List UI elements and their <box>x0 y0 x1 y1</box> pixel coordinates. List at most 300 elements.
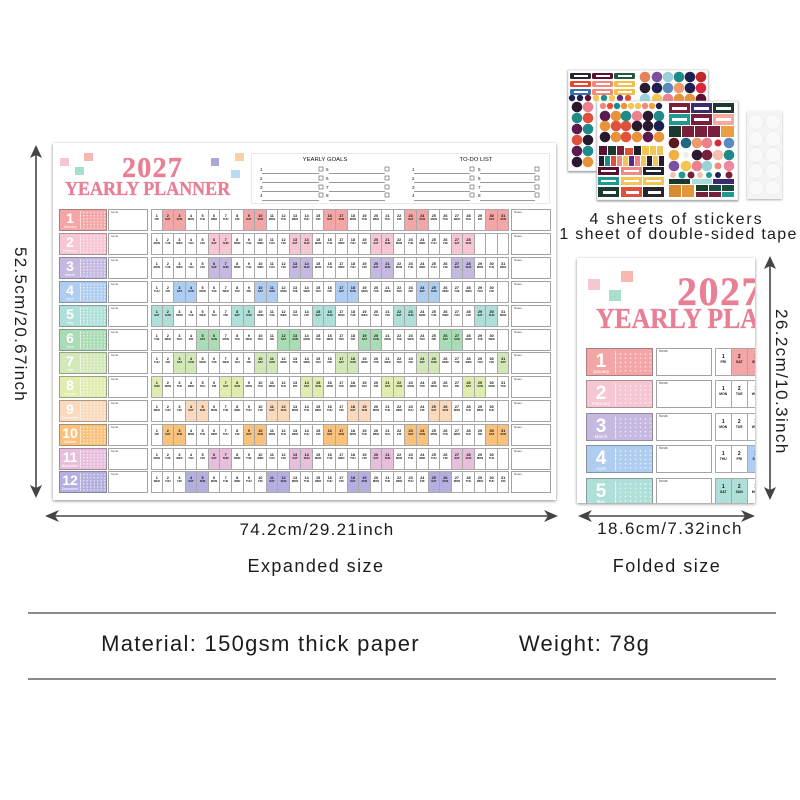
row: December: 29 <box>478 476 482 480</box>
row: March: 7 <box>225 262 227 266</box>
row: April: THU <box>396 290 402 293</box>
row: September: MON <box>373 409 379 412</box>
row: December: WED <box>154 480 160 483</box>
row: June: 3 <box>178 334 180 338</box>
row: July: THU <box>315 361 321 364</box>
row: July: WED <box>384 361 391 364</box>
goal and to-do numbers: 1 <box>412 167 415 172</box>
row: April: FRI <box>408 290 413 293</box>
row: February: 4 <box>190 238 192 242</box>
row: May: 1 <box>722 484 725 490</box>
row: January: FRI <box>155 218 159 221</box>
row: May: SUN <box>246 314 252 317</box>
row: March: March <box>65 273 75 277</box>
row: September: THU <box>165 409 171 412</box>
row: November: Notes <box>514 449 522 453</box>
row: February: FRI <box>362 242 367 245</box>
sticker sheet back <box>568 70 708 171</box>
row: August: SAT <box>223 385 228 388</box>
row: June: THU <box>419 338 425 341</box>
row: December: 15 <box>316 476 320 480</box>
row: November: WED <box>338 457 344 460</box>
row: November: SUN <box>385 457 390 460</box>
row: July: MON <box>280 361 287 364</box>
row: November: 16 <box>328 453 332 457</box>
row: January: 14 <box>304 214 309 218</box>
row: August: 15 <box>316 381 320 385</box>
row: January: SUN <box>338 218 344 221</box>
arrow: expanded height <box>30 145 42 498</box>
writing lines <box>262 174 535 200</box>
row: February: 10 <box>258 238 262 242</box>
row: February: SAT <box>212 242 217 245</box>
decorative colour squares <box>588 271 633 301</box>
row: August: 8 <box>66 377 74 393</box>
row: April: SUN <box>350 290 356 293</box>
row: July: 15 <box>316 357 320 361</box>
row: December: WED <box>477 480 483 483</box>
row: November: 14 <box>304 453 309 457</box>
row: March: WED <box>419 266 425 269</box>
row: January: 18 <box>351 214 355 218</box>
row: September: FRI <box>177 409 182 412</box>
row: January: 1 <box>66 210 74 226</box>
row: March: focus <box>111 258 118 262</box>
row: January: 27 <box>455 214 459 218</box>
row: February: WED <box>257 242 263 245</box>
row: September: WED <box>477 409 483 412</box>
row: March: 17 <box>339 262 343 266</box>
row: May: MON <box>257 314 263 317</box>
row: October: 29 <box>478 429 482 433</box>
row: January: 12 <box>281 214 286 218</box>
row: September: 25 <box>432 405 436 409</box>
row: February: MON <box>315 242 321 245</box>
row: June: 20 <box>374 334 378 338</box>
row: August: 5 <box>201 381 204 385</box>
row: October: 18 <box>351 429 355 433</box>
row: January: 3 <box>178 214 180 218</box>
row: December: 31 <box>501 476 505 480</box>
row: January: 19 <box>362 214 367 218</box>
row: July: MON <box>361 361 368 364</box>
row: July: 8 <box>236 357 238 361</box>
row: February: TUE <box>327 242 332 245</box>
row: October: SAT <box>408 433 413 436</box>
row: February: SUN <box>223 242 228 245</box>
row: July: 13 <box>293 357 297 361</box>
row: January: SUN <box>258 218 263 221</box>
row: January: Notes <box>514 210 522 214</box>
row: September: THU <box>489 409 494 412</box>
row: August: 2 <box>167 381 169 385</box>
row: March: 5 <box>201 262 204 266</box>
row: August: 28 <box>466 381 471 385</box>
row: February: 7 <box>225 238 227 242</box>
row: May: WED <box>280 314 287 317</box>
row: March <box>586 413 755 441</box>
row: April: 26 <box>443 286 447 290</box>
row: December: 13 <box>293 476 297 480</box>
row: January: SAT <box>736 360 743 364</box>
row: August: SAT <box>304 385 309 388</box>
row: January <box>586 348 755 376</box>
row: July: 28 <box>466 357 471 361</box>
row: May: THU <box>373 314 379 317</box>
row: April: WED <box>303 290 310 293</box>
row: December <box>59 471 551 493</box>
row: November: 10 <box>258 453 262 457</box>
row: February: FRI <box>281 242 286 245</box>
row: April: 14 <box>304 286 309 290</box>
row: March: MON <box>477 266 483 269</box>
row: November: 1 <box>156 453 158 457</box>
row: May: SAT <box>477 314 483 317</box>
row: July: SUN <box>431 361 437 364</box>
row: June: FRI <box>432 338 436 341</box>
row: February: 8 <box>236 238 238 242</box>
row: February: 5 <box>201 238 204 242</box>
row: September: SAT <box>431 409 436 412</box>
row: July: 12 <box>281 357 286 361</box>
row: January: WED <box>211 218 217 221</box>
row: August: MON <box>488 385 495 388</box>
row: August: 19 <box>362 381 367 385</box>
row: June: June <box>66 345 74 349</box>
row: November: THU <box>431 457 437 460</box>
row: June: 21 <box>385 334 390 338</box>
row: June: SAT <box>200 338 205 341</box>
row: November: 18 <box>351 453 355 457</box>
row: October: 10 <box>258 429 262 433</box>
row: December: THU <box>489 480 494 483</box>
row: August: MON <box>327 385 333 388</box>
row: November: 19 <box>362 453 367 457</box>
row: December: FRI <box>501 480 505 483</box>
double-sided tape sheet <box>747 111 782 199</box>
row: August: SAT <box>385 385 390 388</box>
row: February: TUE <box>736 392 743 396</box>
row: March: 29 <box>478 262 482 266</box>
row: September: 26 <box>443 405 447 409</box>
row: November: SUN <box>466 457 471 460</box>
row: July: FRI <box>489 361 494 364</box>
row: March: 30 <box>489 262 494 266</box>
row: June: 12 <box>281 334 286 338</box>
row: June: 28 <box>466 334 471 338</box>
row: December: THU <box>408 480 413 483</box>
row: May: 27 <box>455 310 459 314</box>
row: October: TUE <box>443 433 448 436</box>
row: April: TUE <box>454 290 460 293</box>
row: November: 30 <box>489 453 494 457</box>
row: May: 23 <box>409 310 413 314</box>
row: July: 22 <box>397 357 401 361</box>
row: February: 15 <box>316 238 320 242</box>
row: June: 9 <box>248 334 250 338</box>
row: March: WED <box>257 266 263 269</box>
row: February: 24 <box>420 238 424 242</box>
row: November: 22 <box>397 453 401 457</box>
row: May: MON <box>419 314 425 317</box>
row: June: TUE <box>396 338 402 341</box>
row: December: Notes <box>514 472 522 476</box>
row: February: TUE <box>408 242 413 245</box>
row: April: 16 <box>328 286 332 290</box>
row: June: 13 <box>293 334 297 338</box>
row: November: SAT <box>373 457 379 460</box>
row: September: 10 <box>258 405 262 409</box>
row: April: FRI <box>489 290 494 293</box>
row: October <box>59 424 551 446</box>
row: October: 6 <box>213 429 215 433</box>
row: July: MON <box>442 361 448 364</box>
row: May: MON <box>176 314 183 317</box>
row: January: 2 <box>167 214 169 218</box>
row: October: SUN <box>177 433 182 436</box>
row: March: 31 <box>501 262 505 266</box>
row: September: 19 <box>362 405 367 409</box>
row: October: 25 <box>432 429 436 433</box>
row: January: SAT <box>246 218 251 221</box>
checkboxes <box>319 167 539 197</box>
row: June: 4 <box>190 334 192 338</box>
row: December: 26 <box>443 476 447 480</box>
row: March: THU <box>188 266 194 269</box>
row: July: 26 <box>443 357 447 361</box>
row: January: SUN <box>500 218 506 221</box>
row: April: 28 <box>466 286 471 290</box>
row: April: 18 <box>351 286 355 290</box>
row: April: Notes <box>514 282 522 286</box>
row: March: WED <box>176 266 183 269</box>
row: April: 7 <box>225 286 227 290</box>
row: August: 16 <box>328 381 332 385</box>
row: February: THU <box>431 242 437 245</box>
row: September: 16 <box>328 405 332 409</box>
row: May: 2 <box>167 310 169 314</box>
row: November: SUN <box>304 457 309 460</box>
row: April: SAT <box>258 290 263 293</box>
goal and to-do numbers: 8 <box>478 193 481 198</box>
row: July: TUE <box>292 361 298 364</box>
row: March <box>59 257 551 279</box>
row: February: 25 <box>432 238 436 242</box>
row: June: 17 <box>339 334 343 338</box>
row: June: 18 <box>351 334 355 338</box>
row: June: 8 <box>236 334 238 338</box>
row: November: 25 <box>432 453 436 457</box>
row: January: 1 <box>156 214 158 218</box>
row: March: 23 <box>409 262 413 266</box>
row: May: THU <box>292 314 298 317</box>
row: April: 8 <box>236 286 238 290</box>
row: April: TUE <box>373 290 379 293</box>
row: September: 9 <box>248 405 250 409</box>
row: December: TUE <box>385 480 390 483</box>
goal and to-do numbers: 6 <box>326 176 329 181</box>
row: March: 28 <box>466 262 471 266</box>
row: June: WED <box>488 338 495 341</box>
row: June: FRI <box>270 338 274 341</box>
row: June: THU <box>258 338 263 341</box>
row: September: FRI <box>258 409 263 412</box>
label: expanded height: 52.5cm/20.67inch <box>11 247 30 402</box>
row: January: 24 <box>420 214 424 218</box>
row: January: 4 <box>190 214 192 218</box>
row: August: August <box>64 392 76 396</box>
row: November: 11 <box>270 453 274 457</box>
row: February: SUN <box>385 242 390 245</box>
goal and to-do numbers: 2 <box>412 176 415 181</box>
row: May: TUE <box>188 314 194 317</box>
row: December: 18 <box>351 476 355 480</box>
row: July: WED <box>303 361 310 364</box>
row: March: 19 <box>362 262 367 266</box>
row: April: TUE <box>211 290 217 293</box>
row: August: THU <box>281 385 286 388</box>
row: January: 22 <box>397 214 401 218</box>
row: May: 30 <box>489 310 494 314</box>
row: September: MON <box>454 409 460 412</box>
row: May: 14 <box>304 310 309 314</box>
row: May: Notes <box>514 306 522 310</box>
row: July: 30 <box>489 357 494 361</box>
row: September: 23 <box>409 405 413 409</box>
row: October: THU <box>223 433 228 436</box>
row: June: 11 <box>270 334 274 338</box>
row: September: 17 <box>339 405 343 409</box>
row: April: 6 <box>213 286 215 290</box>
row: May <box>586 478 755 503</box>
row: December: SUN <box>442 480 448 483</box>
row: May: 25 <box>432 310 436 314</box>
row: March: THU <box>350 266 356 269</box>
row: September: 18 <box>351 405 355 409</box>
row: July: 7 <box>225 357 227 361</box>
row: June: TUE <box>477 338 483 341</box>
row: January: focus <box>111 210 118 214</box>
row: December: 12 <box>281 476 286 480</box>
row: March: 8 <box>236 262 238 266</box>
row: October: FRI <box>235 433 239 436</box>
row: February: WED <box>419 242 425 245</box>
row: September: 24 <box>420 405 424 409</box>
caption: expanded size: Expanded size <box>248 556 384 576</box>
row: February: FRI <box>200 242 205 245</box>
row: January: TUE <box>200 218 205 221</box>
row: March: SAT <box>212 266 217 269</box>
row: September: WED <box>396 409 402 412</box>
row: November: 27 <box>455 453 459 457</box>
row: October: 19 <box>362 429 367 433</box>
row: April: SAT <box>339 290 344 293</box>
row: August: 20 <box>374 381 378 385</box>
row: February: TUE <box>246 242 251 245</box>
goal and to-do numbers: 7 <box>478 185 481 190</box>
row: May: 28 <box>466 310 471 314</box>
row: November: TUE <box>408 457 413 460</box>
row: August: MON <box>246 385 252 388</box>
row: October: 12 <box>281 429 286 433</box>
row: January: THU <box>223 218 228 221</box>
row: November: 17 <box>339 453 343 457</box>
row: September: 15 <box>316 405 320 409</box>
row: August: TUE <box>500 385 506 388</box>
row: April: 17 <box>339 286 343 290</box>
row: May: TUE <box>269 314 275 317</box>
row: December: 14 <box>304 476 309 480</box>
row: July: 25 <box>432 357 436 361</box>
row: March: SUN <box>223 266 228 269</box>
goal and to-do numbers: 2 <box>260 176 263 181</box>
row: January: FRI <box>397 218 401 221</box>
row: January: 9 <box>248 214 250 218</box>
row: July: 5 <box>201 357 204 361</box>
row: August: 21 <box>385 381 390 385</box>
row: May: 26 <box>443 310 447 314</box>
row: January: 28 <box>466 214 471 218</box>
title: 2027: 2027 <box>122 153 183 184</box>
row: May: 9 <box>248 310 250 314</box>
row: June: 5 <box>201 334 204 338</box>
row: May: 1 <box>156 310 158 314</box>
row: September: 27 <box>455 405 459 409</box>
row: January: 13 <box>293 214 297 218</box>
row: October: FRI <box>155 433 159 436</box>
row: November: WED <box>176 457 183 460</box>
row: December: 28 <box>466 476 471 480</box>
row: February: February <box>592 401 610 406</box>
row: November: FRI <box>200 457 205 460</box>
row: May: MON <box>338 314 344 317</box>
row: January: SAT <box>489 218 494 221</box>
row: June: SUN <box>211 338 217 341</box>
row: October: TUE <box>200 433 205 436</box>
row: June: SUN <box>292 338 298 341</box>
row: August: 17 <box>339 381 343 385</box>
row: January: TUE <box>362 218 367 221</box>
row: October: 27 <box>455 429 459 433</box>
row: February: focus <box>111 234 118 238</box>
row: March: 13 <box>293 262 297 266</box>
row: April: 25 <box>432 286 436 290</box>
row: June: 16 <box>328 334 332 338</box>
row: December: SAT <box>350 480 355 483</box>
row: October: 3 <box>178 429 180 433</box>
row: April: FRI <box>166 290 170 293</box>
row: September: FRI <box>420 409 424 412</box>
row: December: SUN <box>200 480 205 483</box>
row: September: SUN <box>362 409 367 412</box>
row: July: 2 <box>167 357 169 361</box>
row: April: MON <box>199 290 206 293</box>
row: June: 6 <box>66 330 74 346</box>
row: March: TUE <box>489 266 494 269</box>
row: May: SAT <box>396 314 402 317</box>
row: July: TUE <box>211 361 217 364</box>
row: June: SUN <box>454 338 460 341</box>
row: November: FRI <box>281 457 286 460</box>
row: January: MON <box>188 218 194 221</box>
row: October: WED <box>292 433 298 436</box>
row: May: THU <box>454 314 460 317</box>
row: November: 5 <box>201 453 204 457</box>
row: July: FRI <box>166 361 170 364</box>
row: November: November <box>62 464 78 468</box>
row: May: SAT <box>235 314 240 317</box>
row: August: WED <box>350 385 356 388</box>
